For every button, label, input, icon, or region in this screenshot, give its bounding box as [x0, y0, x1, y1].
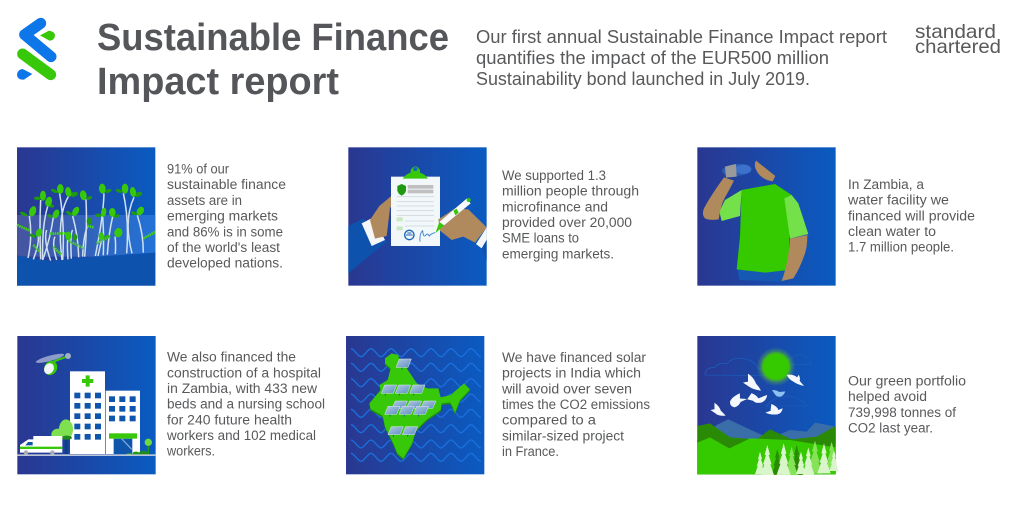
text: green portfolio: Our green portfolio: [848, 374, 966, 388]
text: hospital financing: beds and a nursing school: [167, 397, 325, 412]
text: green portfolio: 739,998 tonnes of: [848, 405, 956, 420]
text: microfinance: SME loans to: [502, 231, 579, 246]
text: emerging markets: 91% of our: [167, 161, 229, 176]
text: microfinance: provided over 20,000: [502, 215, 632, 230]
icon: Standard Chartered logo mark: [17, 23, 55, 80]
text: water facility: clean water to: [848, 224, 936, 239]
panel: India solar map illustration: [346, 336, 484, 474]
text: microfinance: microfinance and: [502, 199, 608, 214]
text: microfinance: [502, 168, 639, 261]
wordmark: standard chartered: standard: [915, 21, 996, 43]
text: India solar projects: similar-sized project: [502, 428, 624, 443]
panel: mangrove seedlings illustration: [17, 147, 155, 286]
intro text: Our first annual Sustainable Finance Impact report: [476, 27, 887, 47]
panel: signing a document illustration: [348, 147, 487, 286]
text: India solar projects: in France.: [502, 444, 559, 459]
text: microfinance: We supported 1.3: [502, 168, 606, 183]
text: emerging markets: emerging markets: [167, 208, 278, 224]
text: hospital financing: for 240 future health: [167, 412, 292, 427]
text: hospital financing: in Zambia, with 433 new: [167, 381, 317, 396]
text: India solar projects: projects in India which: [502, 366, 641, 381]
text: green portfolio: helped avoid: [848, 389, 927, 404]
text: microfinance: million people through: [502, 184, 639, 199]
text: microfinance: emerging markets.: [502, 246, 614, 261]
text: water facility: water facility we: [847, 193, 949, 208]
panel: person drinking water illustration: [697, 147, 836, 286]
text: water facility: In Zambia, a: [848, 177, 924, 192]
text: emerging markets: assets are in: [167, 193, 242, 208]
text: India solar projects: We have financed solar: [502, 350, 647, 365]
panel: hospital illustration: [17, 336, 156, 474]
wordmark: standard chartered: [915, 21, 1001, 58]
title: Impact report: [97, 61, 339, 103]
text: emerging markets: [167, 161, 286, 270]
text: emerging markets: sustainable finance: [167, 177, 286, 192]
text: India solar projects: will avoid over seven: [501, 381, 632, 396]
intro text: Sustainability bond launched in July 2019.: [476, 69, 810, 89]
intro text: quantifies the impact of the EUR500 million: [476, 48, 829, 68]
text: water facility: 1.7 million people.: [848, 240, 954, 255]
text: hospital financing: workers and 102 medical: [166, 428, 316, 443]
text: emerging markets: and 86% is in some: [167, 224, 283, 239]
text: hospital financing: We also financed the: [167, 350, 296, 365]
text: emerging markets: of the world's least: [167, 240, 280, 255]
text: hospital financing: workers.: [166, 444, 215, 459]
panel: green landscape illustration: [697, 336, 839, 475]
text: hospital financing: [166, 350, 325, 459]
text: India solar projects: times the CO2 emissions: [502, 397, 650, 412]
text: water facility: [847, 177, 975, 255]
text: emerging markets: developed nations.: [167, 256, 283, 270]
intro text: [476, 27, 887, 89]
text: India solar projects: [501, 350, 650, 459]
text: water facility: financed will provide: [848, 208, 975, 223]
title: [97, 17, 449, 103]
title: Sustainable Finance: [97, 17, 449, 59]
wordmark: standard chartered: chartered: [915, 36, 1001, 58]
text: hospital financing: construction of a hospital: [167, 365, 321, 380]
text: green portfolio: [848, 374, 966, 436]
text: India solar projects: compared to a: [502, 413, 597, 428]
text: green portfolio: CO2 last year.: [848, 421, 933, 436]
